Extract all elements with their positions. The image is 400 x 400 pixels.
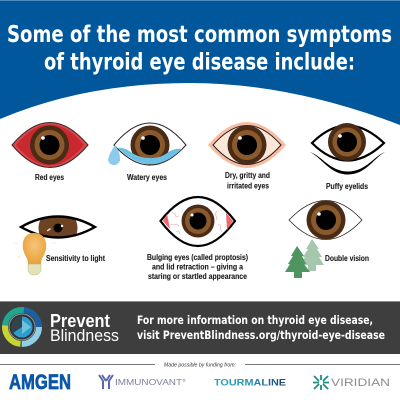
icon: dry eye: [208, 122, 286, 168]
logo wordmark: Blindness: [50, 326, 119, 345]
logo: viridian: VIRIDIAN: [331, 377, 390, 389]
icon: light bulb: [14, 233, 56, 275]
label: double vision: Double vision: [325, 253, 369, 263]
label: dry eyes: irritated eyes: [227, 180, 269, 190]
label: red eyes: Red eyes: [35, 172, 64, 182]
icon: tear drop: [108, 145, 120, 165]
icon: pine trees: [285, 239, 324, 278]
logo: immunovant: IMMUNOVANT°: [115, 377, 186, 387]
label: sensitivity to light: Sensitivity to light: [46, 253, 105, 263]
icon: bulging eye: [160, 197, 235, 246]
label: bulging eyes: and lid retraction – giving a: [152, 262, 243, 272]
logo: amgen: AMGEN: [9, 371, 71, 394]
label: dry eyes: [225, 170, 270, 190]
label: bulging eyes: Bulging eyes (called proptosis): [147, 252, 248, 262]
icon: double vision eye: [289, 200, 362, 240]
funding line: Made possible by funding from:: [164, 362, 237, 368]
footer information text: [137, 313, 385, 342]
title: [7, 22, 392, 76]
logo wordmark: [50, 311, 119, 345]
label: dry eyes: Dry, gritty and: [225, 170, 270, 180]
icon: light sensitive eye: [18, 215, 98, 239]
icon: puffy eye: [310, 123, 385, 174]
logo wordmark: Prevent: [50, 311, 110, 331]
logo: viridian: [313, 375, 390, 390]
icon: watery eye: [108, 123, 186, 165]
label: bulging eyes: [147, 252, 248, 281]
label: watery eyes: Watery eyes: [127, 172, 167, 182]
label: puffy eyelids: Puffy eyelids: [326, 181, 368, 191]
icon: red eye: [12, 122, 88, 168]
icon: prevent blindness logo: [4, 309, 40, 345]
header banner: [0, 0, 400, 125]
label: bulging eyes: staring or startled appearance: [148, 271, 247, 281]
footer band: [0, 301, 400, 354]
logo: tourmaline: TOURMALINE: [214, 378, 286, 388]
logo: immunovant: [99, 375, 186, 389]
